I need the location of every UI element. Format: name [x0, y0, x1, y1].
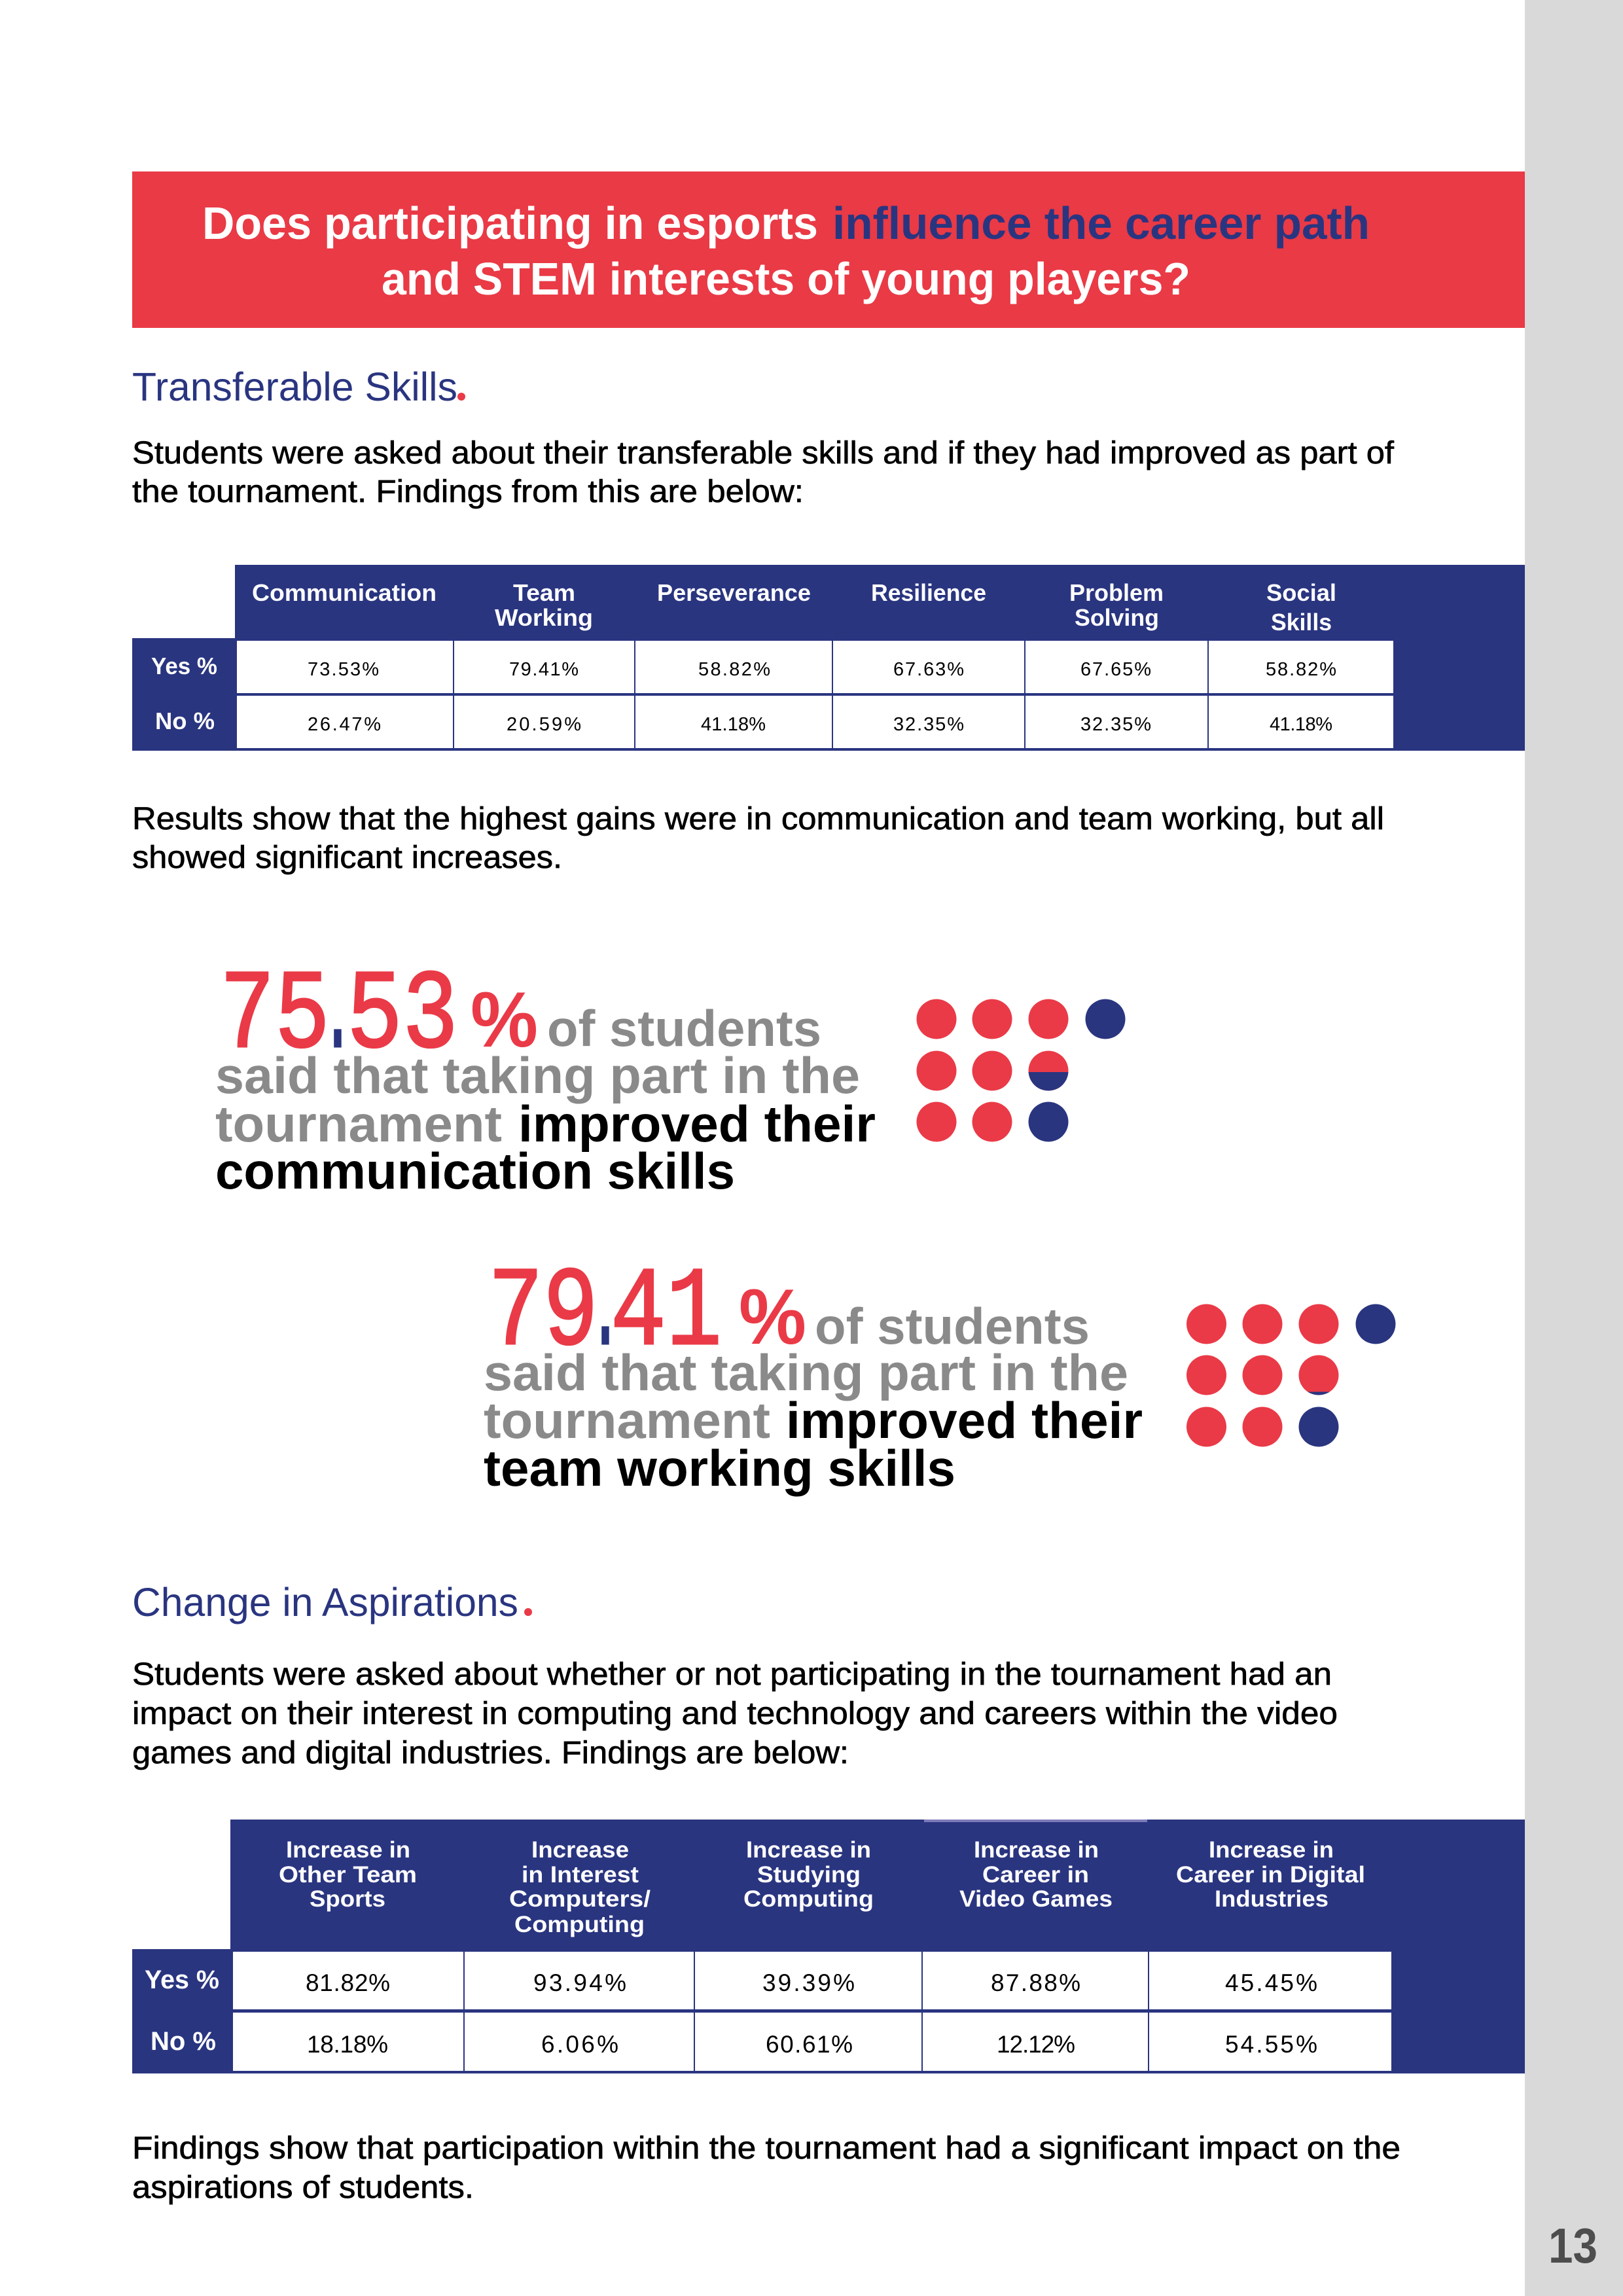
- column headers: Sports: [310, 1886, 385, 1912]
- column headers: Increase: [531, 1837, 629, 1863]
- column headers: Social: [1266, 579, 1336, 606]
- column headers: Computers/: [509, 1886, 651, 1912]
- intro text: transferable skills: [132, 436, 1395, 509]
- yes values: 73.53%: [308, 659, 379, 680]
- stat caption: of students: [547, 999, 821, 1057]
- big number 79.41%: [488, 1250, 806, 1378]
- findings text: [132, 2131, 1400, 2205]
- column headers: Increase in: [1209, 1837, 1334, 1863]
- stat caption: said that taking part in the: [215, 1047, 860, 1104]
- yes values: 93.94%: [533, 1969, 626, 1996]
- big number 75.53%: 53: [347, 953, 458, 1081]
- findings text: aspirations of students.: [132, 2170, 474, 2205]
- stat caption: improved their: [518, 1095, 876, 1153]
- column headers: Industries: [1215, 1886, 1329, 1912]
- no values: 6.06%: [541, 2031, 618, 2058]
- side panel: [1525, 0, 1623, 2296]
- no values: 60.61%: [766, 2031, 853, 2058]
- intro text: aspirations: Students were asked about whether or not participating in the tournament had an: [132, 1657, 1332, 1692]
- stat caption: improved their: [786, 1391, 1143, 1449]
- no values: 32.35%: [1080, 714, 1151, 735]
- title highlight: influence the career path: [832, 198, 1370, 249]
- column headers: Other Team: [279, 1862, 417, 1888]
- column headers: Resilience: [871, 579, 986, 606]
- row labels: Yes %: [151, 653, 217, 679]
- table: aspirations: [132, 1820, 1525, 2073]
- column headers: Increase in: [286, 1837, 410, 1863]
- big number 79.41%: 79: [488, 1250, 598, 1378]
- title line two: and STEM interests of young players?: [382, 253, 1190, 304]
- column headers: Increase in: [746, 1837, 871, 1863]
- column headers: Career in Digital: [1176, 1862, 1365, 1888]
- yes values: 87.88%: [991, 1969, 1080, 1996]
- no values: 18.18%: [307, 2031, 388, 2058]
- yes values: 67.63%: [893, 659, 964, 680]
- big number 75.53%: 75: [220, 953, 330, 1081]
- big number 79.41%: 41: [611, 1250, 722, 1378]
- no values: 32.35%: [893, 714, 964, 735]
- row labels: [151, 653, 217, 734]
- no values: 26.47%: [308, 714, 381, 735]
- intro text: transferable skills: the tournament. Findings from this are below:: [132, 475, 804, 509]
- no values: 12.12%: [997, 2031, 1075, 2058]
- stat: team working: [484, 1250, 1395, 1497]
- stat caption: [215, 999, 876, 1200]
- big number 75.53%: [220, 953, 538, 1081]
- no values: [307, 2031, 1317, 2058]
- big number 75.53%: %: [471, 976, 538, 1064]
- findings text: Findings show that participation within the tournament had a significant impact on the: [132, 2131, 1400, 2166]
- heading: transferable skills: Transferable Skills: [132, 365, 457, 409]
- yes values: [306, 1969, 1317, 1996]
- big number 79.41%: .: [588, 1250, 622, 1378]
- column headers: Skills: [1271, 609, 1332, 636]
- column headers: Computing: [514, 1912, 645, 1937]
- column headers: Studying: [757, 1862, 861, 1888]
- column headers: Problem: [1069, 579, 1164, 606]
- results text: Results show that the highest gains were in communication and team working, but all: [132, 802, 1384, 836]
- big number 79.41%: %: [739, 1273, 806, 1361]
- yes values: [308, 659, 1336, 680]
- no values: 41.18%: [1270, 714, 1332, 735]
- column headers: [279, 1837, 1365, 1937]
- title line one: Does participating in esports: [202, 198, 818, 249]
- intro text: transferable skills: Students were asked about their transferable skills and if they had improved as part of: [132, 436, 1395, 471]
- no values: [308, 714, 1332, 735]
- yes values: 67.65%: [1080, 659, 1151, 680]
- intro text: aspirations: [132, 1657, 1338, 1770]
- intro text: aspirations: impact on their interest in computing and technology and careers within the video: [132, 1696, 1338, 1731]
- stat caption: tournament: [484, 1391, 770, 1449]
- column headers: Solving: [1075, 604, 1159, 631]
- no values: 54.55%: [1225, 2031, 1317, 2058]
- yes values: 58.82%: [1266, 659, 1336, 680]
- no values: 41.18%: [701, 714, 766, 735]
- big number 75.53%: .: [321, 953, 355, 1081]
- yes values: 81.82%: [306, 1969, 390, 1996]
- stat caption: communication skills: [215, 1142, 735, 1200]
- yes values: 58.82%: [698, 659, 770, 680]
- heading: change in aspirations: Change in Aspirations: [132, 1580, 518, 1624]
- stat caption: [484, 1297, 1143, 1497]
- dot pictogram: [916, 999, 1126, 1141]
- row labels: No %: [151, 2027, 216, 2056]
- yes values: 45.45%: [1225, 1969, 1317, 1996]
- stat: communication: [216, 970, 1126, 1189]
- no values: 20.59%: [507, 714, 581, 735]
- column headers: Increase in: [974, 1837, 1099, 1863]
- row labels: [145, 1965, 219, 2056]
- column headers: [252, 579, 1336, 636]
- stat caption: of students: [815, 1297, 1090, 1355]
- column headers: Communication: [252, 579, 437, 606]
- column headers: Video Games: [959, 1886, 1113, 1912]
- yes values: 79.41%: [509, 659, 579, 680]
- dot pictogram: [1186, 1304, 1395, 1446]
- intro text: aspirations: games and digital industries. Findings are below:: [132, 1736, 849, 1770]
- column headers: in Interest: [522, 1862, 639, 1888]
- column headers: Career in: [982, 1862, 1089, 1888]
- results text: [132, 802, 1384, 875]
- column headers: Perseverance: [657, 579, 811, 606]
- page number: 13: [1548, 2218, 1597, 2273]
- yes values: 39.39%: [762, 1969, 855, 1996]
- column headers: Computing: [743, 1886, 874, 1912]
- stat caption: team working skills: [484, 1439, 955, 1497]
- column headers: Working: [495, 604, 593, 631]
- stat caption: said that taking part in the: [484, 1344, 1128, 1401]
- title banner: [132, 171, 1525, 328]
- row labels: No %: [155, 708, 215, 734]
- table: transferable skills: [132, 565, 1525, 751]
- stat caption: tournament: [215, 1095, 502, 1153]
- row labels: Yes %: [145, 1965, 219, 1994]
- results text: showed significant increases.: [132, 840, 562, 875]
- column headers: Team: [513, 579, 575, 606]
